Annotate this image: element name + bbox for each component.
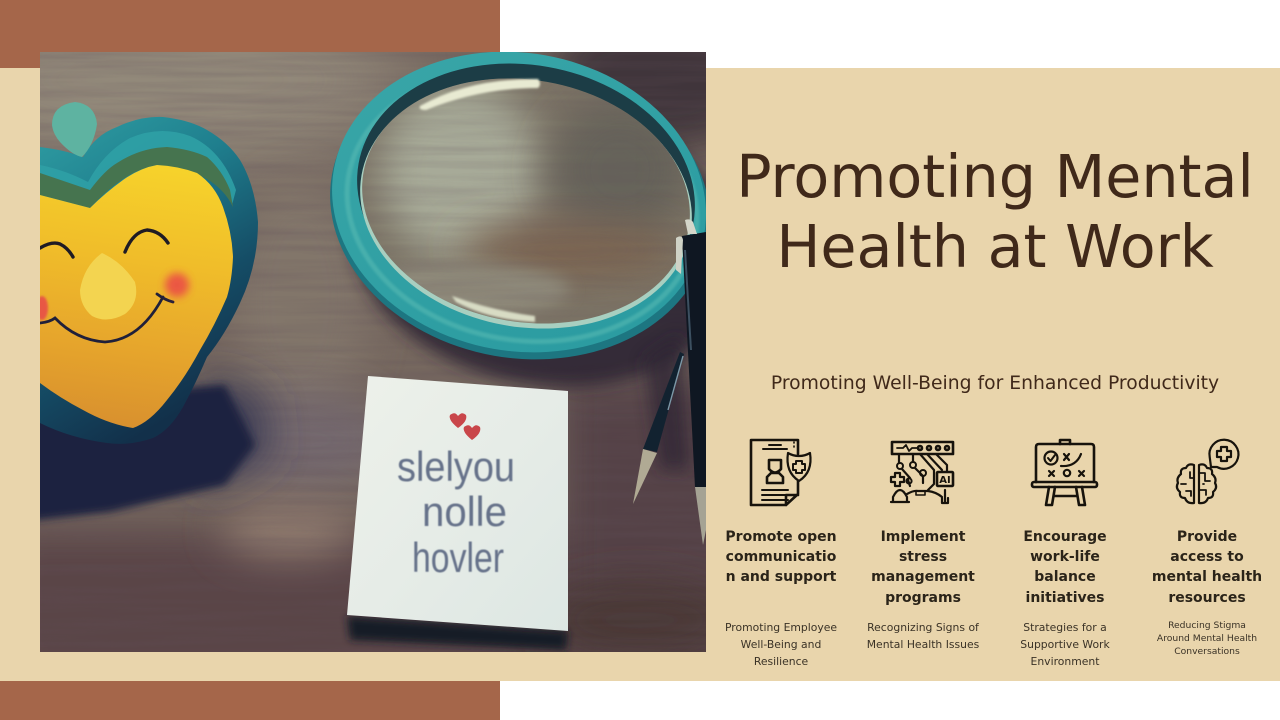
heading: access to [1170, 549, 1244, 565]
pen [633, 219, 706, 545]
icon: AI circuit [890, 440, 954, 504]
description: Resilience [754, 655, 808, 668]
description [1157, 620, 1257, 657]
heading: Implement [881, 529, 965, 545]
title [736, 143, 1254, 281]
description: Well-Being and [741, 638, 821, 651]
icon: hearts [450, 413, 466, 428]
description [725, 621, 837, 668]
description: Promoting Employee [725, 621, 837, 634]
title: Health at Work [776, 213, 1214, 281]
heading [1023, 529, 1107, 606]
photo: smiling heart toy, mirror and note on wooden desk [40, 52, 706, 652]
item: work-life balance [1020, 529, 1110, 668]
description: Environment [1031, 655, 1099, 668]
heading: initiatives [1026, 590, 1104, 606]
description: Mental Health Issues [867, 638, 979, 651]
wood grain [40, 52, 706, 652]
icon: strategy board [1030, 438, 1098, 506]
heading: mental health [1152, 569, 1262, 585]
bottom accent bar [0, 681, 500, 720]
description: Supportive Work [1020, 638, 1110, 651]
heading: programs [885, 590, 961, 606]
heart toy [36, 102, 258, 444]
icon: brain with medical bubble [1176, 438, 1240, 504]
top accent bar [0, 0, 500, 68]
description [1020, 621, 1110, 668]
handwritten note [397, 443, 515, 581]
wood base [40, 52, 706, 652]
heading: communicatio [726, 549, 836, 565]
heading: resources [1168, 590, 1246, 606]
heading: stress [899, 549, 947, 565]
handwritten note: hovler [412, 534, 504, 581]
heading: Encourage [1023, 529, 1107, 545]
icon: document with shield [750, 438, 812, 506]
heading [725, 529, 837, 585]
handwritten note: slelyou [397, 443, 515, 490]
description: Recognizing Signs of [867, 621, 979, 634]
description: Reducing Stigma [1168, 620, 1246, 631]
item: stress management [867, 529, 979, 651]
note card [347, 376, 568, 650]
heading: balance [1034, 569, 1096, 585]
heading [1152, 529, 1262, 606]
heading: management [871, 569, 975, 585]
item: mental health resources [1152, 529, 1262, 657]
title: Promoting Mental [736, 143, 1254, 211]
heading: Promote open [725, 529, 837, 545]
heading: work-life [1030, 549, 1100, 565]
icon: AI circuit: AI [939, 475, 951, 486]
description: Around Mental Health [1157, 633, 1257, 644]
description: Conversations [1174, 646, 1240, 657]
mirror [330, 52, 706, 360]
subtitle: Promoting Well-Being for Enhanced Productivity [771, 373, 1219, 394]
mirror shadow [329, 73, 761, 417]
heading [871, 529, 975, 606]
item: promote communication [725, 529, 837, 668]
heading: n and support [726, 569, 836, 585]
heading: Provide [1177, 529, 1237, 545]
description [867, 621, 979, 651]
description: Strategies for a [1023, 621, 1107, 634]
toy shadow [200, 375, 270, 490]
handwritten note: nolle [422, 488, 507, 535]
